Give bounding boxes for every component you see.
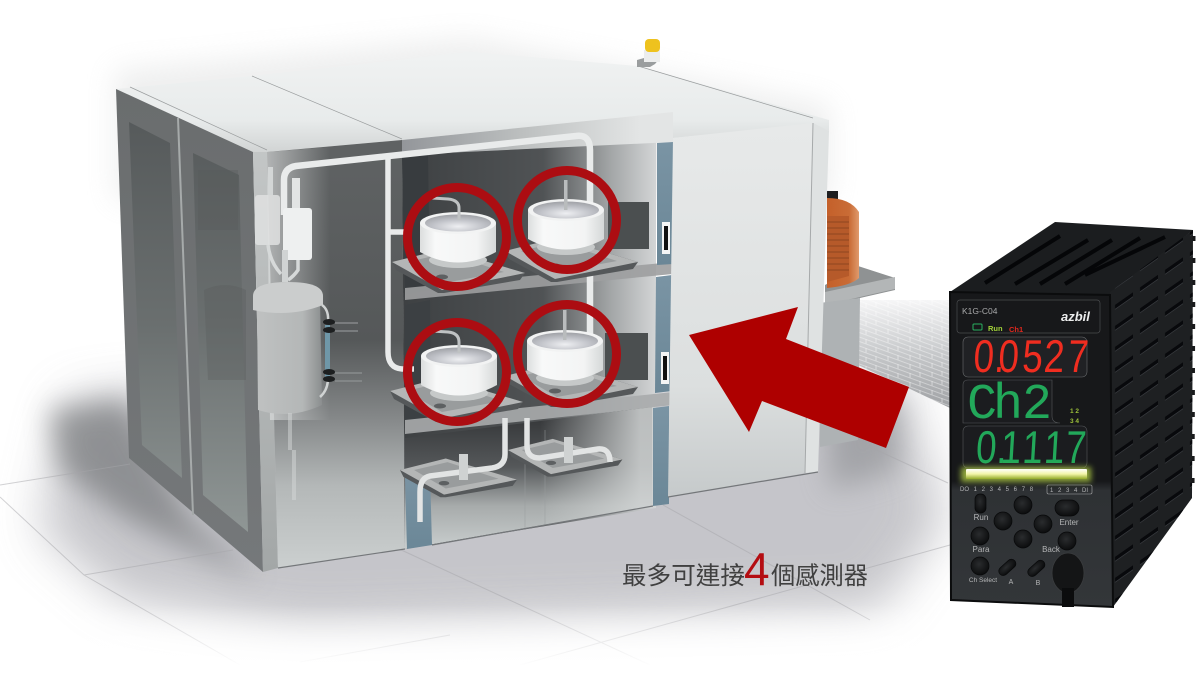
button labels: Run xyxy=(974,513,988,522)
caption: 個感測器 xyxy=(771,562,868,590)
steel tank xyxy=(257,300,322,414)
ghost equipment in rear window xyxy=(198,170,246,380)
lower bay xyxy=(405,400,655,550)
chamber windows xyxy=(605,202,649,380)
button labels: Para xyxy=(973,545,990,554)
sensor cylinder 3 xyxy=(421,331,497,401)
status indicators xyxy=(973,324,1023,334)
azbil logo: azbil xyxy=(1061,309,1090,324)
blue-gray door posts xyxy=(405,142,673,549)
sensor cylinder 2 xyxy=(528,180,604,255)
dark left strip of chamber xyxy=(402,154,430,295)
cabinet top xyxy=(116,52,829,152)
cabinet left side face xyxy=(116,89,263,572)
device top xyxy=(950,222,1193,296)
lower fittings xyxy=(459,437,573,480)
warning beacon xyxy=(637,39,660,67)
grid mat xyxy=(858,300,950,408)
channel display: 1 2 xyxy=(1070,408,1079,415)
controller device xyxy=(950,222,1194,607)
button labels: B xyxy=(1036,580,1041,587)
device front panel xyxy=(950,292,1113,607)
red display: 0.0527 xyxy=(972,330,1090,382)
rear filter xyxy=(255,195,280,245)
back tank: orange vessel with tray xyxy=(819,191,895,447)
sensor cylinder 4 xyxy=(527,310,603,386)
device body side xyxy=(1110,230,1193,607)
front left panel xyxy=(267,140,405,568)
caption: 4 xyxy=(744,543,770,595)
button labels xyxy=(969,513,1079,587)
button labels: Ch Select xyxy=(969,577,997,584)
green value display: 0.1117 xyxy=(975,421,1088,473)
caption: 最多可連接 xyxy=(622,562,745,590)
sensor cylinder 1 xyxy=(420,198,496,268)
large red arrow xyxy=(689,307,909,448)
caption xyxy=(622,543,868,595)
trays with sensors xyxy=(390,180,638,522)
lower trays xyxy=(400,459,517,497)
door handles xyxy=(661,222,670,384)
loader port cover xyxy=(1052,553,1084,607)
corner column xyxy=(253,152,278,572)
piping xyxy=(284,136,590,369)
lower pipes xyxy=(420,418,610,522)
floor tile lines xyxy=(0,440,950,665)
DO DI labels xyxy=(960,485,1092,494)
front filter xyxy=(283,208,312,260)
button labels: Back xyxy=(1042,545,1061,554)
buttons xyxy=(971,494,1079,578)
cabinet machine xyxy=(116,52,829,572)
front chamber xyxy=(402,142,656,549)
channel display: 3 4 xyxy=(1070,418,1079,425)
right cabinet strip xyxy=(805,123,829,473)
button labels: A xyxy=(1009,579,1014,586)
upper trays xyxy=(392,249,525,293)
upper header box xyxy=(402,112,673,155)
filter and sensor vessel assembly xyxy=(253,167,362,500)
right door panel xyxy=(668,123,813,497)
shelves xyxy=(405,262,673,434)
red highlight circles xyxy=(408,170,616,422)
channel display: Ch2 xyxy=(967,377,1052,434)
button labels: Enter xyxy=(1059,518,1079,527)
model label: K1G-C04 xyxy=(962,306,998,316)
status indicators: Run xyxy=(988,324,1003,333)
DO DI labels: 1 2 3 4 DI xyxy=(1050,488,1088,494)
LED bar xyxy=(961,467,1091,482)
status indicators: Ch1 xyxy=(1009,325,1023,334)
DO DI labels: DO 1 2 3 4 5 6 7 8 xyxy=(960,487,1034,493)
